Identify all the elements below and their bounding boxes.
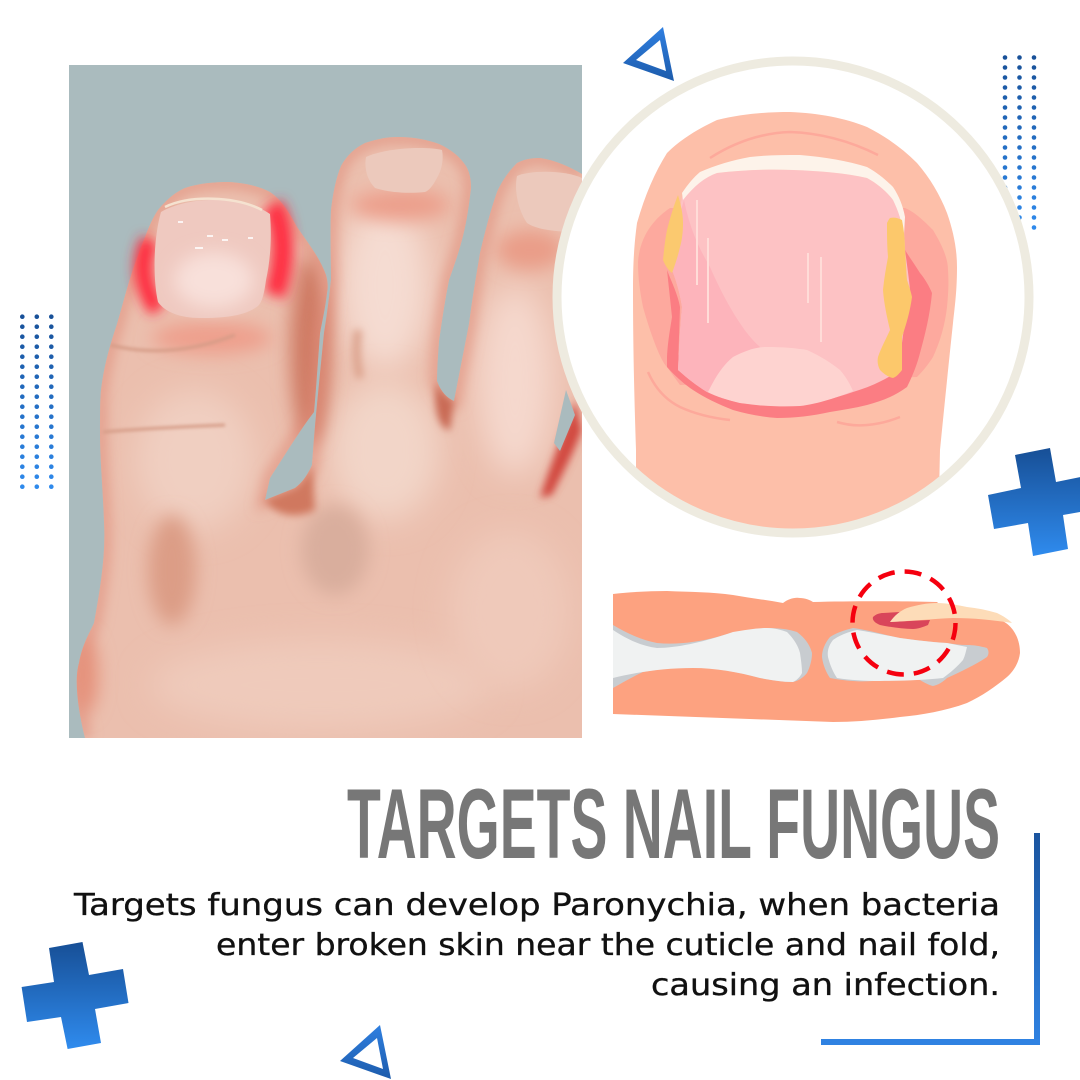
triangle icon bottom [340, 1025, 391, 1079]
dashed highlight circle [852, 572, 956, 674]
body text [73, 888, 1000, 1003]
nail shaded wedge [672, 200, 760, 392]
big toe nail [155, 199, 271, 318]
background gap between toes [554, 390, 575, 451]
left bone highlight [613, 628, 802, 682]
fungus left [663, 195, 683, 273]
second toe nail [365, 148, 443, 193]
nail free edge [682, 155, 905, 235]
lunula [708, 347, 853, 406]
toe [633, 112, 957, 540]
triangle icon top [623, 27, 674, 81]
red inflamed band [667, 250, 932, 418]
finger cross-section diagram [613, 572, 1020, 722]
corner bracket [821, 833, 1040, 1045]
body text: Targets fungus can develop Paronychia, when bacteria [73, 888, 1000, 923]
nail highlights [697, 200, 821, 342]
finger body [613, 591, 1020, 722]
third toe nail [516, 172, 582, 232]
circular nail illustration [557, 61, 1029, 540]
plus icon right [988, 448, 1080, 556]
fungus right [878, 218, 912, 378]
photo: foot with infected toe [69, 65, 582, 740]
nail fold [638, 208, 948, 385]
body text: causing an infection. [651, 968, 1000, 1003]
foot skin and shading [69, 130, 582, 740]
toenail [890, 603, 1012, 623]
right bone highlight [828, 630, 967, 681]
body text: enter broken skin near the cuticle and nail fold, [216, 928, 1000, 963]
infection redness [143, 205, 282, 310]
infected nail bed [873, 612, 930, 629]
left bone [613, 625, 812, 688]
skin fold lines [648, 132, 900, 425]
dot grid top right [1002, 55, 1036, 230]
plus icon bottom left [22, 942, 129, 1049]
nail plate [672, 170, 910, 405]
dot grid left [20, 314, 54, 489]
right bone [822, 628, 988, 686]
circle ring [557, 61, 1029, 533]
